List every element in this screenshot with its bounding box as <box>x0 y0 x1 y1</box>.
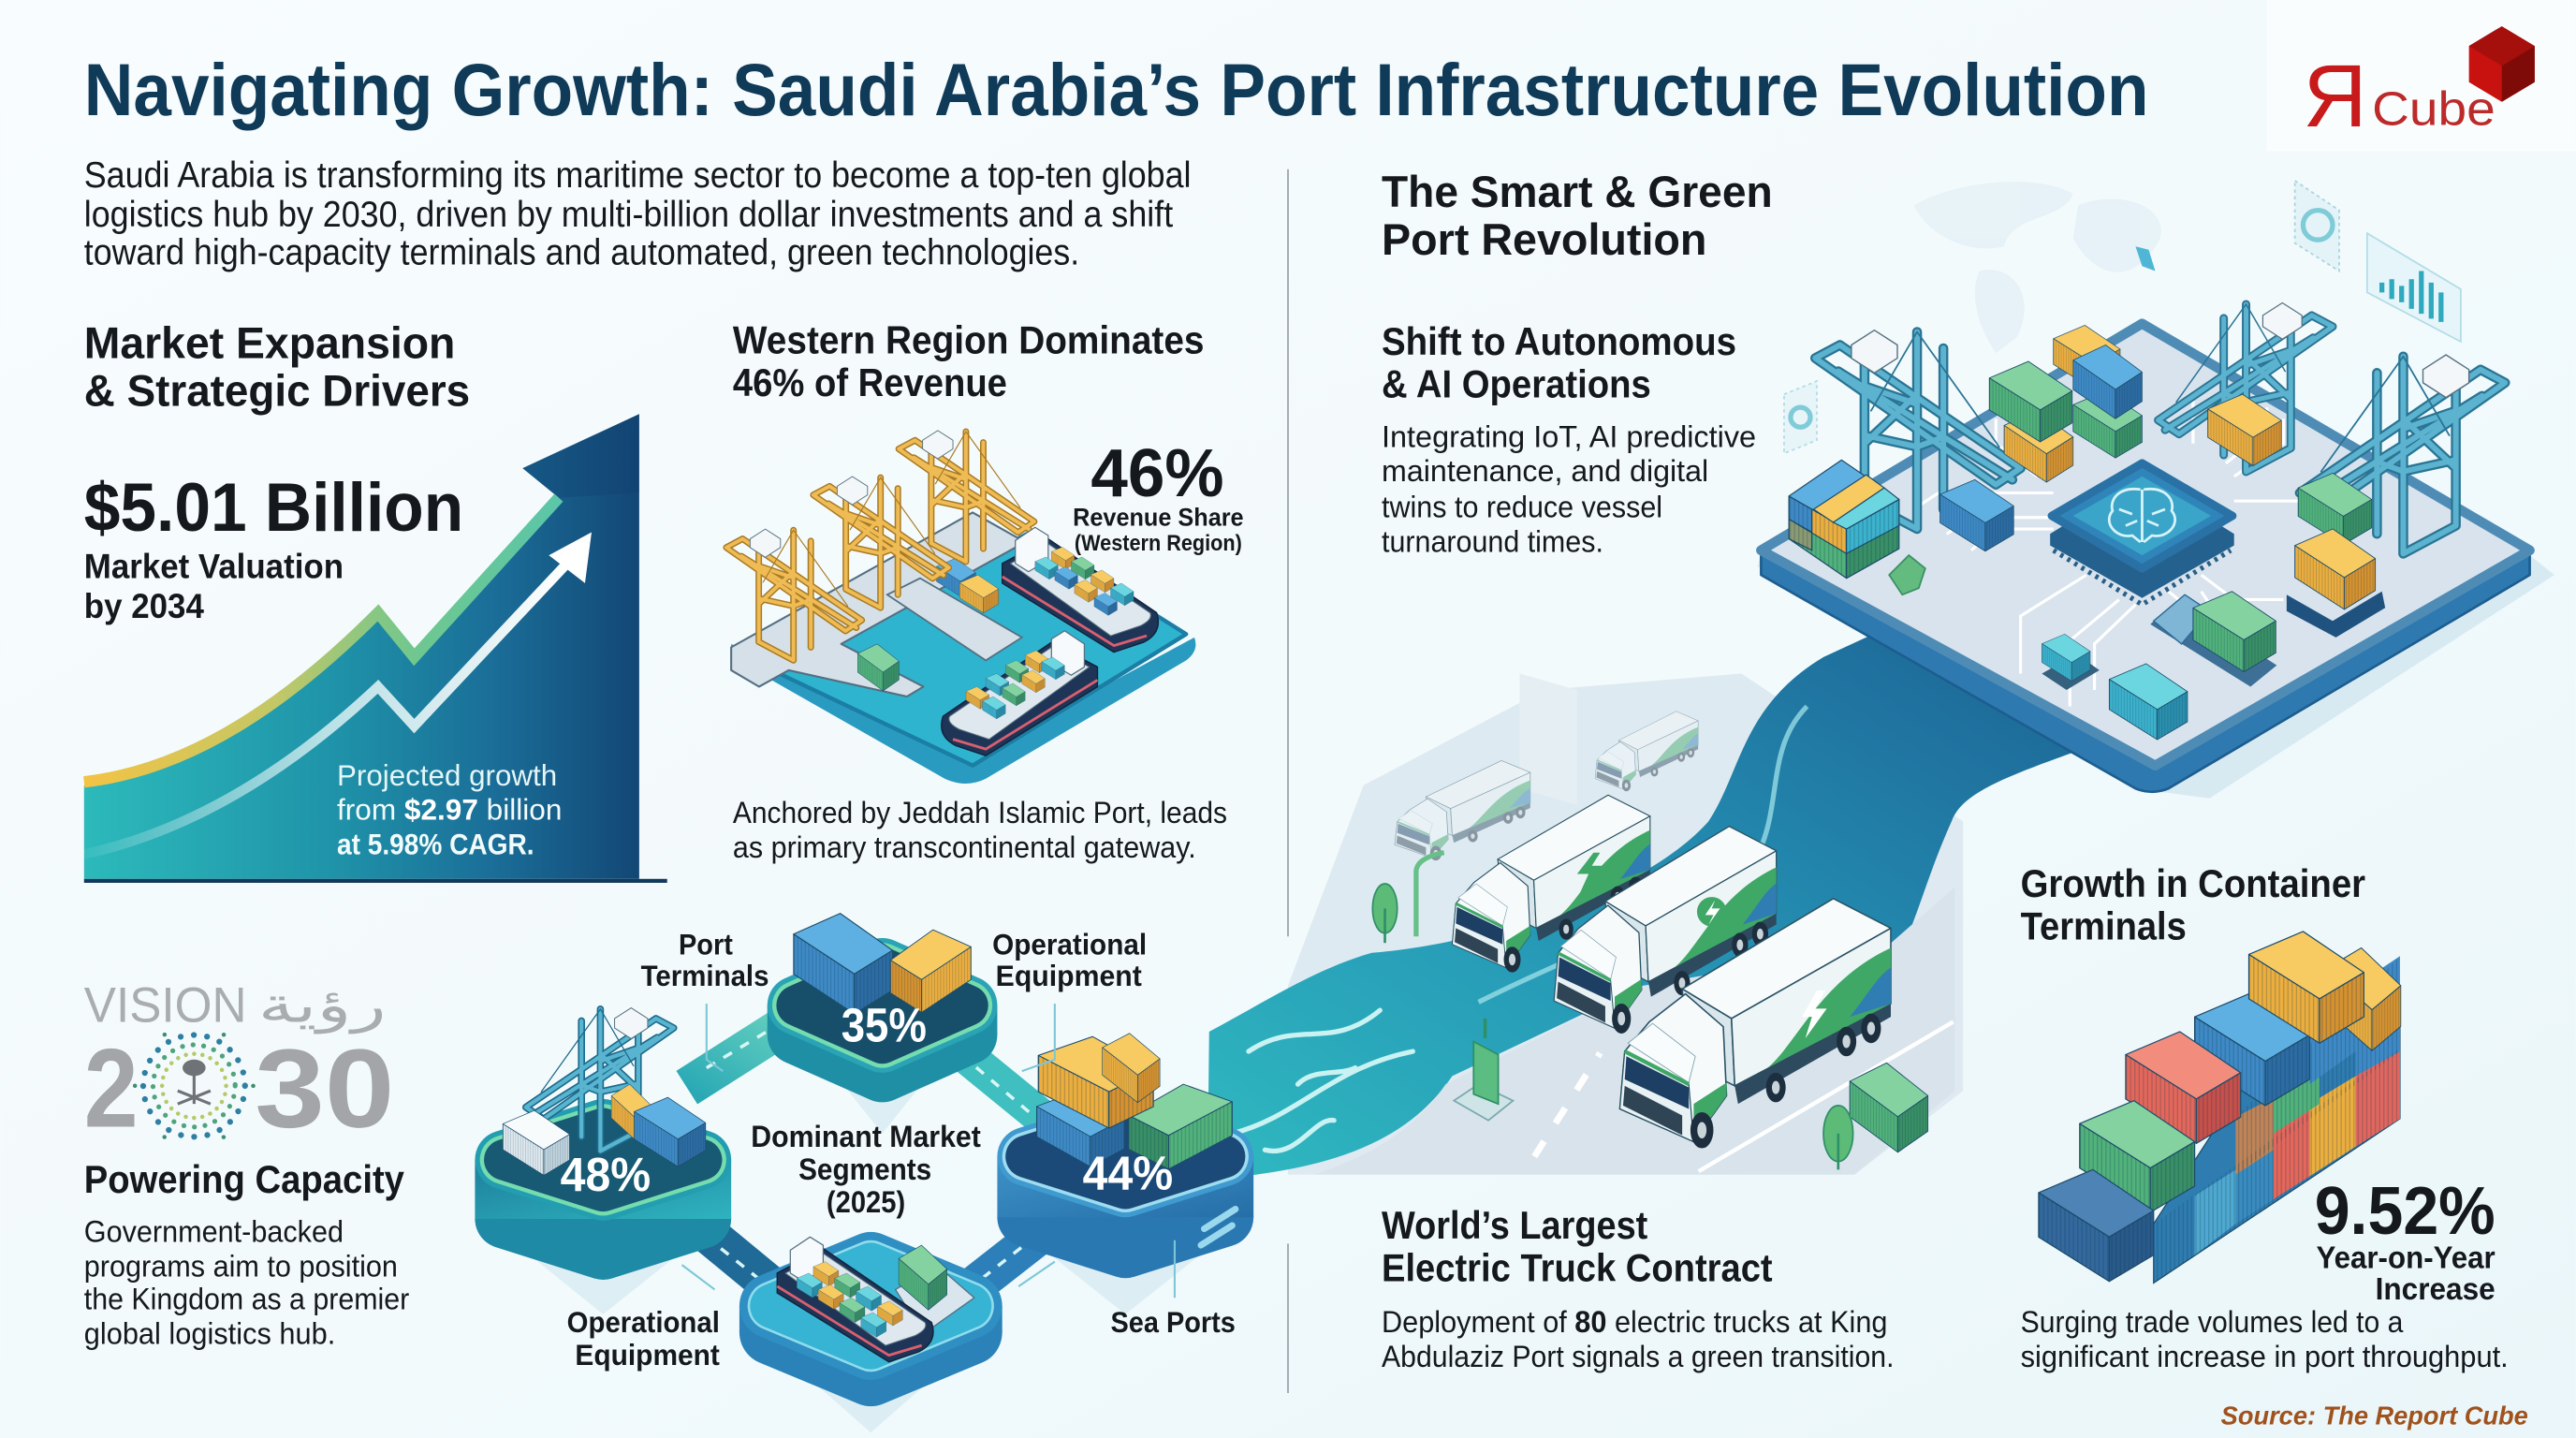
text: powering capacity: Government-backed <box>84 1215 344 1249</box>
heading: electric truck contract: World’s Largest <box>1382 1203 1647 1247</box>
panel: dominant market segments <box>475 914 1253 1432</box>
label: operational equipment top: Operational <box>992 927 1147 961</box>
illustration: automated port platform <box>1758 302 2554 799</box>
label: sea ports: Sea Ports <box>1110 1305 1236 1339</box>
text: powering capacity <box>84 1215 409 1350</box>
text: autonomous operations: maintenance, and digital <box>1382 454 1708 488</box>
intro text <box>84 155 1191 273</box>
text: powering capacity: global logistics hub. <box>84 1316 335 1350</box>
logo: vision 2030: رؤية <box>258 976 387 1034</box>
intro text: Saudi Arabia is transforming its maritime sector to become a top-ten global <box>84 155 1191 196</box>
intro text: logistics hub by 2030, driven by multi-billion dollar investments and a shift <box>84 195 1173 235</box>
panel: vision 2030 <box>84 976 409 1350</box>
river and road flowing into truck scene <box>1208 608 2109 1180</box>
label: dominant market segments <box>751 1120 981 1219</box>
chart caption: Projected growth <box>337 758 557 792</box>
label: operational equipment top: Equipment <box>996 959 1142 992</box>
text: autonomous operations: twins to reduce vessel <box>1382 491 1662 524</box>
icon: green cargo box <box>1850 1063 1928 1152</box>
text: container terminals: significant increase in port throughput. <box>2021 1340 2509 1373</box>
text: jeddah islamic port: Anchored by Jeddah Islamic Port, leads <box>733 796 1227 829</box>
heading: western region: Western Region Dominates <box>733 317 1205 361</box>
metric: market valuation: Market Valuation <box>84 548 344 586</box>
text: autonomous operations: Integrating IoT, AI predictive <box>1382 419 1756 453</box>
heading: container terminals: Terminals <box>2021 904 2187 948</box>
label: dominant market segments: (2025) <box>827 1185 905 1219</box>
text: jeddah islamic port: as primary transcontinental gateway. <box>733 830 1196 864</box>
heading: container terminals: Growth in Container <box>2021 861 2365 905</box>
heading: autonomous operations: & AI Operations <box>1382 362 1651 406</box>
node: 44 percent: 44% <box>1083 1146 1173 1199</box>
icon: AI chip <box>2050 463 2234 605</box>
stat: 46 percent revenue share: (Western Region) <box>1075 532 1242 556</box>
heading: western region <box>733 317 1205 404</box>
logo: vision 2030: 30 <box>255 1027 394 1152</box>
heading: smart and green: The Smart & Green <box>1382 168 1773 217</box>
illustration: container stack <box>2039 932 2401 1283</box>
text: powering capacity: the Kingdom as a premier <box>84 1283 409 1316</box>
faint world map <box>1914 182 2161 353</box>
panel: smart and green port <box>1382 168 2554 799</box>
heading: powering capacity: Powering Capacity <box>84 1157 404 1201</box>
stat: 46 percent revenue share <box>1073 436 1244 556</box>
label: dominant market segments: Dominant Market <box>751 1120 981 1153</box>
heading: electric truck contract <box>1382 1203 1773 1290</box>
logo: RCube: Я <box>2303 47 2367 146</box>
chart caption: at 5.98% CAGR. <box>337 827 534 860</box>
node: 48 percent <box>475 1008 731 1314</box>
node: 48 percent: 48% <box>561 1148 651 1201</box>
text: container terminals: Surging trade volumes led to a <box>2021 1305 2404 1339</box>
connectors <box>682 1010 1060 1298</box>
label: operational equipment bottom: Operational <box>567 1305 720 1339</box>
hologram panels <box>1784 181 2461 453</box>
heading: market expansion: & Strategic Drivers <box>84 366 470 416</box>
node: 44 percent <box>997 1034 1253 1314</box>
icon: trees <box>1372 853 1853 1169</box>
text: autonomous operations: turnaround times. <box>1382 525 1603 559</box>
panel: container growth <box>2021 861 2509 1373</box>
label: dominant market segments: Segments <box>798 1152 931 1186</box>
stat: 9.52 percent <box>2315 1174 2496 1307</box>
stat: 9.52 percent: Increase <box>2376 1272 2496 1307</box>
metric: market valuation: $5.01 Billion <box>84 468 463 546</box>
stat: 46 percent revenue share: 46% <box>1090 436 1224 511</box>
text: electric truck contract: Abdulaziz Port signals a green transition. <box>1382 1340 1894 1373</box>
label: operational equipment bottom: Equipment <box>575 1338 720 1372</box>
illustration: electric trucks <box>1372 712 1928 1169</box>
intro text: toward high-capacity terminals and automated, green technologies. <box>84 233 1079 273</box>
logo: vision 2030: VISION <box>84 977 247 1033</box>
stat: 9.52 percent: Year-on-Year <box>2316 1241 2496 1276</box>
panel: western region <box>726 317 1244 864</box>
label: operational equipment bottom <box>567 1305 720 1372</box>
title: Navigating Growth: Saudi Arabia’s Port Infrastructure Evolution <box>84 49 2148 131</box>
heading: electric truck contract: Electric Truck Contract <box>1382 1246 1773 1290</box>
left container stack <box>1789 460 1899 579</box>
node: 35 percent: 35% <box>842 998 927 1051</box>
leader lines <box>682 1004 1175 1298</box>
heading: container terminals <box>2021 861 2365 948</box>
logo: vision 2030: 2 <box>84 1027 139 1152</box>
heading: autonomous operations: Shift to Autonomous <box>1382 319 1736 363</box>
metric: market valuation <box>84 468 463 625</box>
growth chart <box>84 414 667 883</box>
text: electric truck contract <box>1382 1305 1894 1373</box>
chart caption <box>337 758 562 860</box>
node: sea ship <box>739 1237 1003 1432</box>
label: operational equipment top <box>992 927 1147 992</box>
label: port terminals: Port <box>679 927 733 961</box>
logo: RCube: Cube <box>2372 81 2496 135</box>
label: port terminals: Terminals <box>641 959 769 992</box>
node: 35 percent <box>768 914 997 1134</box>
heading: market expansion <box>84 319 470 416</box>
text: electric truck contract: Deployment of 80 electric trucks at King <box>1382 1305 1887 1339</box>
stat: 46 percent revenue share: Revenue Share <box>1073 503 1244 532</box>
heading: market expansion: Market Expansion <box>84 319 455 369</box>
source credit: Source: The Report Cube <box>2221 1401 2528 1430</box>
icon: charging station <box>1454 1019 1513 1121</box>
text: container terminals <box>2021 1305 2509 1373</box>
label: port terminals <box>641 927 769 992</box>
text: jeddah islamic port <box>733 796 1227 864</box>
chart caption: from $2.97 billion <box>337 793 562 827</box>
text: autonomous operations <box>1382 419 1756 559</box>
heading: smart and green <box>1382 168 1773 265</box>
panel: electric trucks <box>1372 712 1928 1373</box>
metric: market valuation: by 2034 <box>84 587 204 625</box>
logo: RCube <box>2303 26 2535 146</box>
logo backing band <box>2267 0 2576 151</box>
stat: 9.52 percent: 9.52% <box>2315 1174 2496 1249</box>
heading: western region: 46% of Revenue <box>733 360 1007 404</box>
heading: smart and green: Port Revolution <box>1382 215 1706 265</box>
panel: market expansion <box>84 319 667 883</box>
logo: vision 2030 <box>84 976 394 1152</box>
text: powering capacity: programs aim to position <box>84 1249 398 1283</box>
heading: autonomous operations <box>1382 319 1736 406</box>
illustration: western port <box>726 431 1195 784</box>
